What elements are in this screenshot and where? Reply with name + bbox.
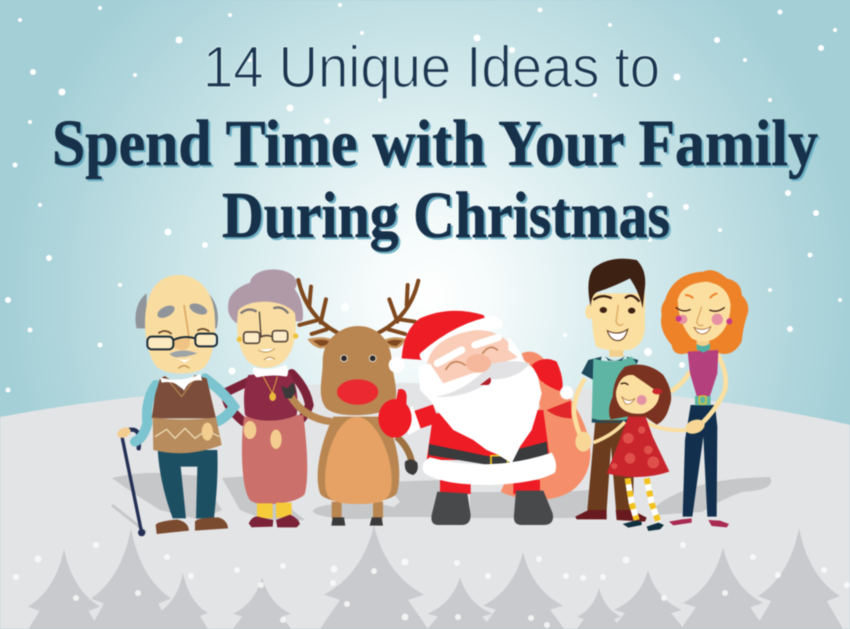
- mouth: [480, 377, 491, 385]
- hands: [244, 421, 282, 449]
- background trees: [25, 525, 843, 629]
- left arm and glove: [412, 413, 436, 422]
- shoes: [156, 517, 228, 534]
- belt: [428, 442, 548, 467]
- face: [237, 302, 296, 368]
- hair back: [609, 365, 671, 425]
- torso: [244, 372, 297, 421]
- smile: [607, 329, 628, 341]
- eyes: [158, 329, 209, 334]
- closed eyes: [676, 307, 725, 311]
- shoes: [623, 521, 664, 531]
- smile: [694, 327, 711, 334]
- body: [318, 417, 399, 503]
- trousers: [440, 480, 471, 494]
- glasses: [244, 331, 288, 343]
- hair clip: [652, 388, 662, 394]
- shoes: [575, 510, 647, 522]
- collar: [160, 374, 202, 391]
- shoes: [249, 515, 300, 527]
- neck and collar: [697, 338, 709, 348]
- face: [427, 330, 517, 390]
- old woman: [226, 269, 309, 527]
- title line 3: During Christmas: [224, 181, 672, 254]
- title line 1: 14 Unique Ideas to: [203, 35, 660, 100]
- pants: [158, 450, 218, 518]
- arms: [226, 373, 309, 430]
- hooves: [331, 517, 383, 526]
- boots: [431, 491, 553, 525]
- buckle: [491, 456, 508, 468]
- cheek: [637, 395, 647, 405]
- left arm with hoof: [290, 395, 332, 422]
- snowy ground: [0, 383, 850, 629]
- cane: [122, 430, 142, 533]
- reindeer: [281, 280, 418, 526]
- trousers: [587, 420, 634, 510]
- side hair: [135, 293, 218, 328]
- arms: [593, 422, 688, 443]
- coat: [427, 410, 550, 460]
- neck: [609, 345, 623, 357]
- eyes: [341, 355, 376, 362]
- right glove and cuff: [532, 359, 563, 392]
- falling snow over the ground: [13, 542, 850, 628]
- title line 3: During Christmas: [222, 179, 670, 252]
- arms: [671, 354, 726, 427]
- santa sack: [501, 352, 590, 500]
- moustache and mouth: [169, 350, 197, 357]
- face: [678, 282, 731, 341]
- hair: [661, 270, 748, 354]
- old man: [116, 275, 234, 536]
- head: [321, 326, 396, 415]
- coat fur trim: [423, 453, 556, 485]
- eyes and mouth: [621, 383, 628, 385]
- father: [574, 259, 647, 522]
- shirt: [592, 357, 637, 420]
- legs: [332, 502, 342, 518]
- hair: [228, 269, 303, 323]
- eyebrows and eyes: [593, 296, 639, 302]
- head: [591, 293, 645, 350]
- red nose: [337, 379, 378, 405]
- beard: [418, 357, 542, 463]
- falling snow in the sky: [5, 3, 842, 392]
- dress: [607, 415, 669, 477]
- dress dots: [611, 426, 659, 469]
- hair: [588, 259, 645, 308]
- nose: [697, 307, 703, 326]
- nose: [616, 305, 623, 325]
- title: [52, 35, 820, 254]
- girl: [593, 365, 707, 531]
- mother: [661, 270, 748, 527]
- head: [145, 275, 215, 374]
- ground shadows: [112, 473, 771, 532]
- closed eyes: [446, 347, 497, 369]
- eyebrows: [437, 337, 498, 363]
- collar: [605, 356, 625, 361]
- cheeks and earrings: [678, 314, 723, 325]
- nose: [184, 305, 189, 344]
- glasses: [147, 334, 217, 349]
- top: [688, 350, 718, 396]
- sweater band: [153, 417, 222, 453]
- joined hands: [683, 417, 707, 436]
- vest: [152, 375, 216, 418]
- hat: [402, 311, 490, 360]
- skirt: [242, 415, 307, 504]
- moustache: [435, 361, 530, 397]
- santa: [378, 311, 573, 525]
- ears: [307, 337, 334, 348]
- arm: [574, 378, 585, 442]
- face: [616, 375, 659, 414]
- trousers: [683, 405, 717, 517]
- belt: [695, 396, 711, 405]
- nose: [466, 354, 491, 373]
- shoes: [669, 518, 729, 527]
- antlers: [298, 280, 418, 334]
- right arm with hoof: [397, 437, 412, 462]
- socks: [257, 503, 273, 518]
- collar and necklace: [253, 365, 288, 377]
- sleeve: [581, 357, 602, 382]
- eyebrows: [155, 301, 209, 320]
- arms: [135, 378, 234, 442]
- hands: [116, 423, 213, 441]
- belly: [325, 417, 392, 504]
- striped legs: [628, 478, 658, 522]
